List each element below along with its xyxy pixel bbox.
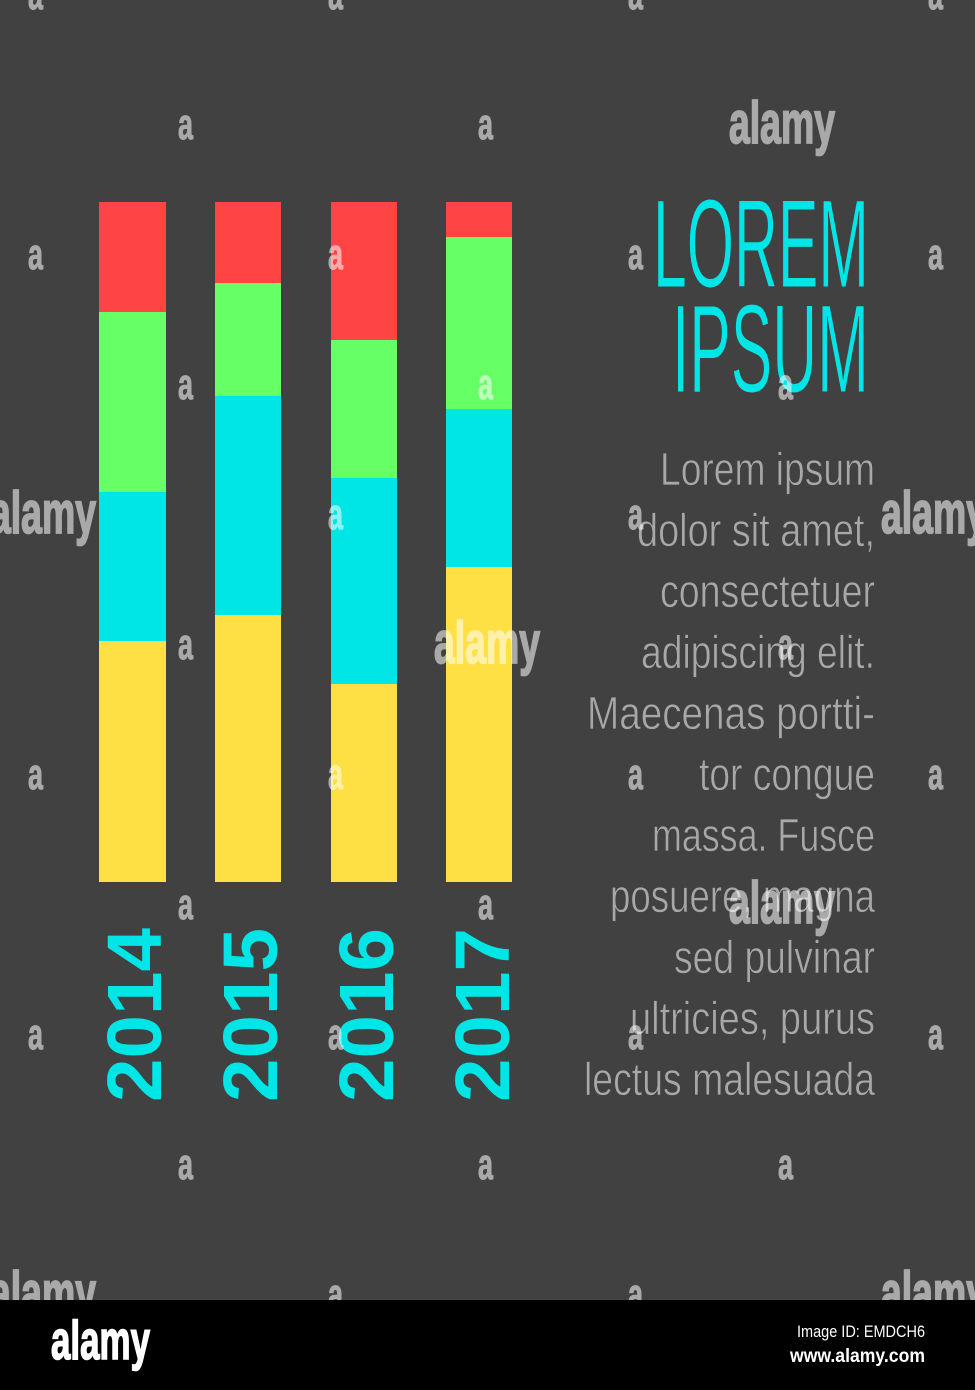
year labels [92,928,526,1102]
body text: Maecenas portti- [587,687,875,739]
watermark pattern: a [178,100,193,149]
stacked bar chart [99,202,512,882]
watermark pattern: a [928,750,943,799]
watermark pattern: a [928,1010,943,1059]
watermark pattern: a [28,1010,43,1059]
label 2014: 2014 [92,928,178,1102]
watermark pattern: a [478,100,493,149]
watermark pattern: alamy [729,870,835,936]
label 2017: 2017 [440,928,526,1102]
label 2016: 2016 [324,928,410,1102]
watermark pattern: a [628,1270,643,1319]
watermark pattern: a [328,750,343,799]
label 2015: 2015 [208,928,294,1102]
watermark pattern: a [628,1010,643,1059]
body text: dolor sit amet, [637,504,875,556]
body text: tor congue [699,748,875,800]
watermark pattern: a [178,620,193,669]
image id: Image ID: EMDCH6 [797,1322,925,1341]
watermark pattern: a [178,360,193,409]
watermark pattern: a [928,230,943,279]
body text: adipiscing elit. [641,626,875,678]
watermark pattern: a [478,360,493,409]
body text: massa. Fusce [652,809,875,861]
body text [584,443,875,1105]
bar 2015 [215,202,281,882]
watermark pattern: a [778,1140,793,1189]
watermark pattern: a [328,490,343,539]
body text: consectetuer [660,565,875,617]
watermark pattern: alamy [434,610,540,676]
body text: posuere, magna [610,870,875,922]
body text: lectus malesuada [584,1053,875,1105]
watermark pattern: a [178,1140,193,1189]
title [653,175,869,419]
bar 2014 [99,202,166,882]
watermark pattern: a [628,230,643,279]
watermark pattern: a [628,490,643,539]
body text: ultricies, purus [630,992,875,1044]
footer bar [0,1300,975,1390]
bar 2017 [446,202,512,882]
watermark pattern: a [778,620,793,669]
watermark pattern: a [328,230,343,279]
watermark pattern: a [628,750,643,799]
watermark pattern: a [478,1140,493,1189]
body text: Lorem ipsum [660,443,875,495]
watermark pattern: a [778,360,793,409]
footer logo: alamy [51,1309,150,1371]
watermark pattern: a [28,750,43,799]
watermark pattern: a [328,1010,343,1059]
watermark pattern: a [478,880,493,929]
watermark pattern: a [178,880,193,929]
watermark pattern: a [328,1270,343,1319]
body text: sed pulvinar [674,931,875,983]
watermark pattern: alamy [729,90,835,156]
website: www.alamy.com [789,1346,925,1367]
watermark pattern: a [28,230,43,279]
bar 2016 [331,202,397,882]
